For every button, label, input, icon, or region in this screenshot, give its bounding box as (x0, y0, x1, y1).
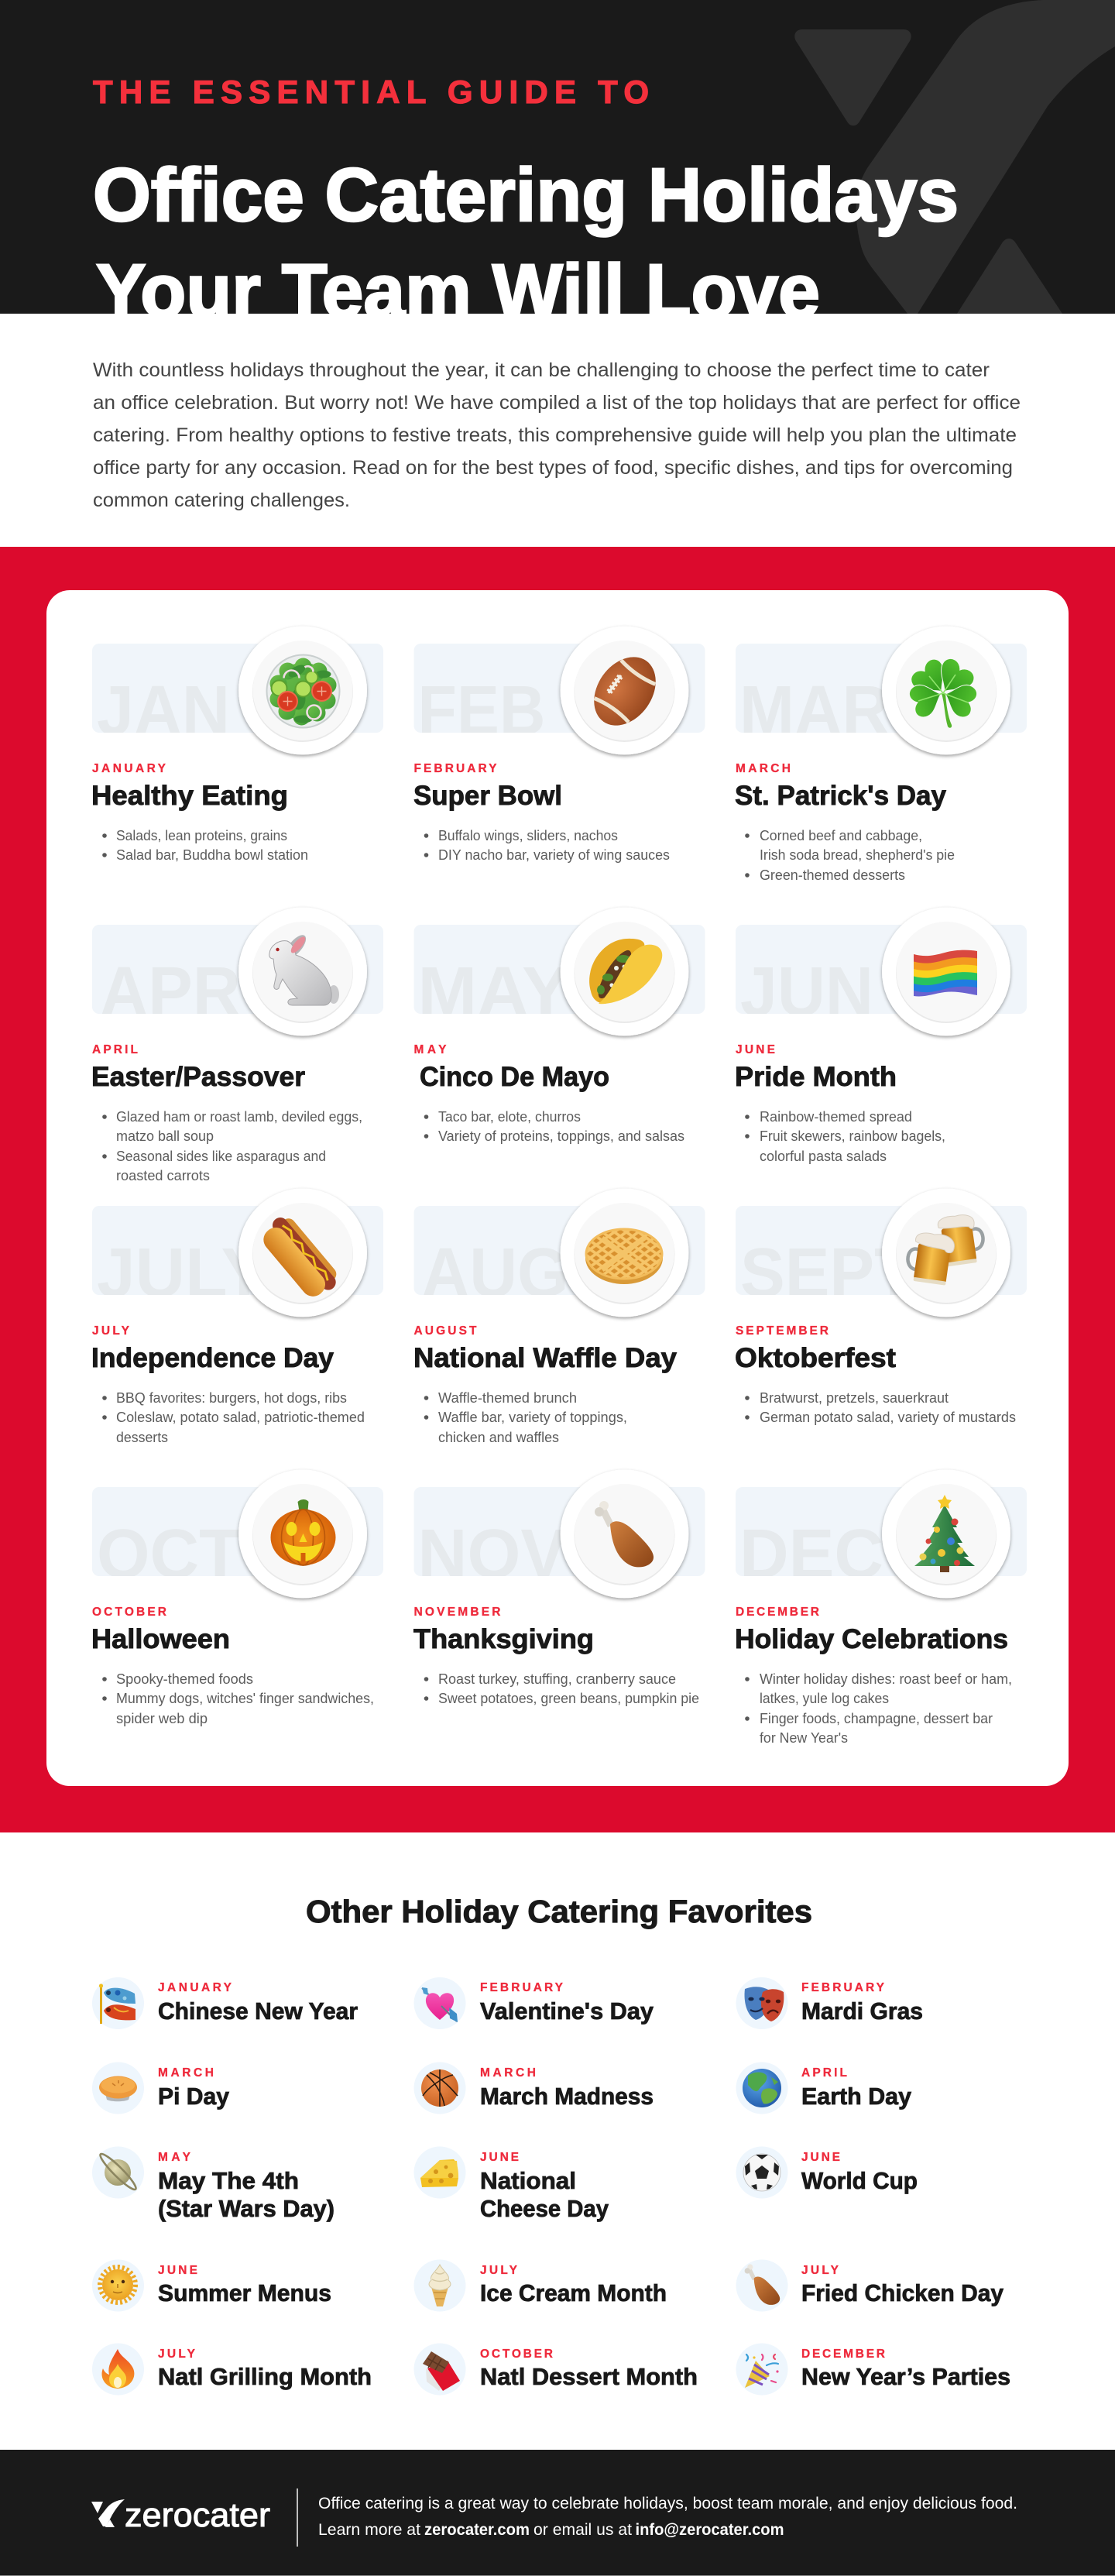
icon: theatre masks (736, 1977, 788, 2029)
month panel: AUG (421, 1235, 568, 1312)
title (480, 2167, 609, 2222)
white card (46, 590, 1069, 1786)
icon: jack-o-lantern (271, 1499, 336, 1565)
month label: MAY (158, 2151, 191, 2164)
dish list: Salad bar, Buddha bowl station (116, 847, 308, 863)
favorite: Natl Grilling Month (92, 2344, 372, 2395)
dish list (424, 1390, 627, 1445)
icon: party popper (736, 2344, 788, 2395)
heading: Oktoberfest (735, 1343, 896, 1373)
favorite: Natl Dessert Month (413, 2344, 698, 2395)
icon: ringed planet (92, 2147, 144, 2198)
favorite: Earth Day (736, 2062, 912, 2114)
title: Your Team Will Love (96, 249, 820, 333)
dish list: Salads, lean proteins, grains (116, 828, 287, 843)
header banner (0, 0, 1115, 333)
month panel (413, 925, 705, 1031)
dish list: Taco bar, elote, churros (438, 1109, 581, 1125)
month panel: SEPT (740, 1235, 915, 1312)
month label: MARCH (480, 2066, 536, 2080)
header logo watermark (794, 0, 1115, 314)
card: August National Waffle Day (413, 1188, 705, 1445)
dish list (424, 828, 670, 863)
dish list: Waffle-themed brunch (438, 1390, 577, 1406)
month label: APRIL (801, 2066, 847, 2080)
plate (882, 626, 1010, 754)
month label: FEBRUARY (413, 762, 497, 775)
dish list (424, 1671, 699, 1706)
dish list: chicken and waffles (438, 1430, 559, 1445)
card: May Cinco De Mayo (413, 908, 705, 1144)
icon: heart with arrow (413, 1977, 466, 2029)
card: July Independence Day (91, 1188, 383, 1445)
intro paragraph (93, 359, 1021, 511)
plate (238, 626, 367, 754)
favorite: Summer Menus (92, 2260, 331, 2311)
favorite: Mardi Gras (736, 1977, 923, 2029)
dish list: spider web dip (116, 1711, 208, 1726)
month panel: FEB (418, 672, 545, 750)
month label: AUGUST (413, 1324, 477, 1338)
title: Ice Cream Month (480, 2279, 667, 2306)
plate (238, 1188, 367, 1317)
month panel (736, 925, 1027, 1031)
title: Mardi Gras (801, 1997, 923, 2025)
dish list: desserts (116, 1430, 168, 1445)
favorite: New Year's Parties (736, 2344, 1010, 2395)
footer text: Learn more at (318, 2521, 420, 2539)
footer logo: zerocater (125, 2496, 270, 2534)
month panel: MAR (739, 672, 890, 750)
icon: flame (92, 2344, 144, 2395)
month label: FEBRUARY (480, 1981, 564, 1994)
heading: Cinco De Mayo (420, 1062, 609, 1092)
title: Pi Day (158, 2083, 230, 2110)
month panel: DEC (739, 1516, 883, 1593)
heading: Healthy Eating (91, 781, 288, 811)
month label: MAY (413, 1043, 447, 1056)
dish list: colorful pasta salads (760, 1149, 887, 1164)
heading: Halloween (91, 1624, 230, 1654)
heading: Independence Day (91, 1343, 334, 1373)
icon: ice cream cone (413, 2260, 466, 2311)
month panel (92, 925, 383, 1031)
favorite: Ice Cream Month (413, 2260, 667, 2311)
title: New Year’s Parties (801, 2363, 1010, 2390)
dish list (745, 1390, 1016, 1425)
favorite: Pi Day (92, 2062, 230, 2114)
dish list: Mummy dogs, witches' finger sandwiches, (116, 1691, 374, 1706)
favorite: Chinese New Year (92, 1977, 358, 2029)
month panel (736, 1487, 1027, 1593)
heading: St. Patrick's Day (735, 781, 947, 811)
title: Fried Chicken Day (801, 2279, 1004, 2306)
month label: FEBRUARY (801, 1981, 885, 1994)
dish list (745, 1109, 945, 1164)
heading: Pride Month (735, 1062, 897, 1092)
card: April Easter/Passover (91, 908, 383, 1183)
month label: MARCH (736, 762, 791, 775)
month panel (92, 644, 383, 750)
icon: hot dog (256, 1211, 343, 1304)
month label: JULY (158, 2348, 196, 2361)
plate (561, 1188, 689, 1317)
intro paragraph: catering. From healthy options to festive treats, this comprehensive guide will help you plan the ultimate (93, 424, 1017, 446)
month label: NOVEMBER (413, 1606, 500, 1619)
footer text: or email us at (533, 2521, 632, 2539)
month label: JULY (92, 1324, 130, 1338)
card: January Healthy Eating (91, 626, 383, 863)
card: February Super Bowl (413, 626, 705, 863)
plate (561, 908, 689, 1036)
month panel (736, 1206, 1027, 1312)
plate (882, 1470, 1010, 1599)
month panel: JUN (740, 953, 873, 1031)
icon: rabbit (269, 932, 339, 1005)
card: October Halloween (91, 1470, 383, 1726)
plate (561, 1470, 689, 1599)
month panel: APR (100, 953, 241, 1031)
footer text (318, 2495, 1017, 2539)
intro paragraph: office party for any occasion. Read on for the best types of food, specific dishes, and tips for overcoming (93, 457, 1013, 479)
intro paragraph: With countless holidays throughout the year, it can be challenging to choose the perfect time to cater (93, 359, 990, 381)
dish list: Winter holiday dishes: roast beef or ham, (760, 1671, 1012, 1687)
icon: four-leaf clover (907, 655, 979, 728)
icon: sun with face (92, 2260, 144, 2311)
dish list: Fruit skewers, rainbow bagels, (760, 1128, 945, 1144)
footer text: zerocater.com (424, 2521, 530, 2539)
month panel (413, 644, 705, 750)
title: Summer Menus (158, 2279, 331, 2306)
month panel: NOV (418, 1516, 567, 1593)
dish list (102, 1671, 374, 1726)
heading: Super Bowl (413, 781, 562, 811)
dish list (102, 1109, 362, 1183)
icon: rainbow flag (914, 950, 977, 996)
icon: globe (736, 2062, 788, 2114)
dish list: Green-themed desserts (760, 867, 905, 883)
dish list: Sweet potatoes, green beans, pumpkin pie (438, 1691, 699, 1706)
favorite: National Cheese Day (413, 2147, 609, 2222)
title: Natl Dessert Month (480, 2363, 698, 2390)
dish list: Seasonal sides like asparagus and (116, 1149, 326, 1164)
icon: cheese wedge (413, 2147, 466, 2198)
eyebrow: THE ESSENTIAL GUIDE TO (93, 74, 649, 110)
month panel (736, 644, 1027, 750)
dish list (424, 1109, 684, 1144)
footer text: info@zerocater.com (635, 2521, 784, 2539)
dish list: Coleslaw, potato salad, patriotic-themed (116, 1410, 365, 1425)
footer bar (0, 2450, 1115, 2575)
title: Valentine's Day (480, 1997, 654, 2025)
month label: MARCH (158, 2066, 214, 2080)
title: March Madness (480, 2083, 654, 2110)
icon: drumstick (736, 2260, 788, 2311)
month label: JUNE (801, 2151, 840, 2164)
footer divider (297, 2488, 298, 2547)
card: March St. Patrick's Day (735, 626, 1027, 883)
month label: OCTOBER (92, 1606, 166, 1619)
month label: JUNE (158, 2264, 197, 2277)
month panel: MAY (418, 953, 570, 1031)
icon: football (582, 645, 668, 737)
month panel (92, 1206, 383, 1312)
dish list: Irish soda bread, shepherd's pie (760, 847, 955, 863)
month label: JUNE (736, 1043, 775, 1056)
title: Earth Day (801, 2083, 912, 2110)
dish list: BBQ favorites: burgers, hot dogs, ribs (116, 1390, 347, 1406)
month label: JANUARY (158, 1981, 232, 1994)
icon: soccer ball (736, 2147, 788, 2198)
dish list: Corned beef and cabbage, (760, 828, 922, 843)
heading: Thanksgiving (413, 1624, 594, 1654)
favorite: March Madness (413, 2062, 654, 2114)
dish list: DIY nacho bar, variety of wing sauces (438, 847, 670, 863)
dish list: Bratwurst, pretzels, sauerkraut (760, 1390, 949, 1406)
favorite: Fried Chicken Day (736, 2260, 1004, 2311)
plate (238, 1470, 367, 1599)
title: World Cup (801, 2167, 918, 2194)
title: May The 4th (158, 2167, 299, 2194)
icon: carp streamers (92, 1977, 144, 2029)
card: September Oktoberfest (735, 1188, 1027, 1425)
icon: turkey leg (595, 1501, 654, 1567)
favorite: Valentine's Day (413, 1977, 654, 2029)
dish list (102, 828, 308, 863)
title: Office Catering Holidays (93, 153, 959, 237)
icon: taco (589, 939, 662, 1004)
title: (Star Wars Day) (158, 2195, 334, 2222)
dish list (745, 1671, 1012, 1746)
title (158, 2167, 334, 2222)
dish list: Variety of proteins, toppings, and salsas (438, 1128, 684, 1144)
dish list: latkes, yule log cakes (760, 1691, 889, 1706)
plate (238, 908, 367, 1036)
card: November Thanksgiving (413, 1470, 705, 1706)
intro paragraph: common catering challenges. (93, 489, 350, 511)
dish list: Roast turkey, stuffing, cranberry sauce (438, 1671, 676, 1687)
month panel: OCT (97, 1516, 241, 1593)
dish list: Glazed ham or roast lamb, deviled eggs, (116, 1109, 362, 1125)
plate (882, 908, 1010, 1036)
month label: DECEMBER (801, 2348, 885, 2361)
dish list: matzo ball soup (116, 1128, 214, 1144)
dish list: Rainbow-themed spread (760, 1109, 912, 1125)
icon: Christmas tree (914, 1495, 975, 1572)
month label: SEPTEMBER (736, 1324, 829, 1338)
footer text: Office catering is a great way to celebrate holidays, boost team morale, and enjoy delicious food. (318, 2495, 1017, 2512)
dish list: Buffalo wings, sliders, nachos (438, 828, 618, 843)
month label: JULY (801, 2264, 839, 2277)
icon: salad (266, 654, 341, 728)
month label: DECEMBER (736, 1606, 819, 1619)
month label: APRIL (92, 1043, 138, 1056)
dish list: Waffle bar, variety of toppings, (438, 1410, 627, 1425)
month label: OCTOBER (480, 2348, 553, 2361)
month panel (413, 1206, 705, 1312)
intro paragraph: an office celebration. But worry not! We have compiled a list of the top holidays that are perfect for office (93, 392, 1021, 414)
plate (882, 1188, 1010, 1317)
dish list: Finger foods, champagne, dessert bar (760, 1711, 993, 1726)
red band (0, 547, 1115, 1832)
heading: Holiday Celebrations (735, 1624, 1008, 1654)
dish list: for New Year's (760, 1730, 848, 1746)
title: Chinese New Year (158, 1997, 358, 2025)
month label: JANUARY (92, 762, 166, 775)
favorite: May The 4th (92, 2147, 334, 2222)
section heading: other favorites: Other Holiday Catering Favorites (306, 1894, 812, 1929)
heading: National Waffle Day (413, 1343, 678, 1373)
card: December Holiday Celebrations (735, 1470, 1027, 1746)
month panel (413, 1487, 705, 1593)
title: National (480, 2167, 576, 2194)
icon: waffle (585, 1229, 663, 1284)
dish list (745, 828, 955, 883)
icon: clinking beer mugs (905, 1212, 986, 1286)
month panel: JAN (97, 672, 230, 750)
icon: chocolate bar (413, 2344, 466, 2395)
dish list: Spooky-themed foods (116, 1671, 253, 1687)
icon: pie (92, 2062, 144, 2114)
favorite: World Cup (736, 2147, 918, 2198)
plate (561, 626, 689, 754)
dish list: German potato salad, variety of mustards (760, 1410, 1016, 1425)
month panel: JULY (97, 1235, 267, 1312)
heading: Easter/Passover (91, 1062, 305, 1092)
dish list: roasted carrots (116, 1168, 210, 1183)
title: Cheese Day (480, 2195, 609, 2222)
icon: basketball (413, 2062, 466, 2114)
title (93, 153, 959, 333)
month label: JULY (480, 2264, 518, 2277)
card: June Pride Month (735, 908, 1027, 1164)
dish list (102, 1390, 365, 1445)
title: Natl Grilling Month (158, 2363, 372, 2390)
month panel (92, 1487, 383, 1593)
month label: JUNE (480, 2151, 519, 2164)
